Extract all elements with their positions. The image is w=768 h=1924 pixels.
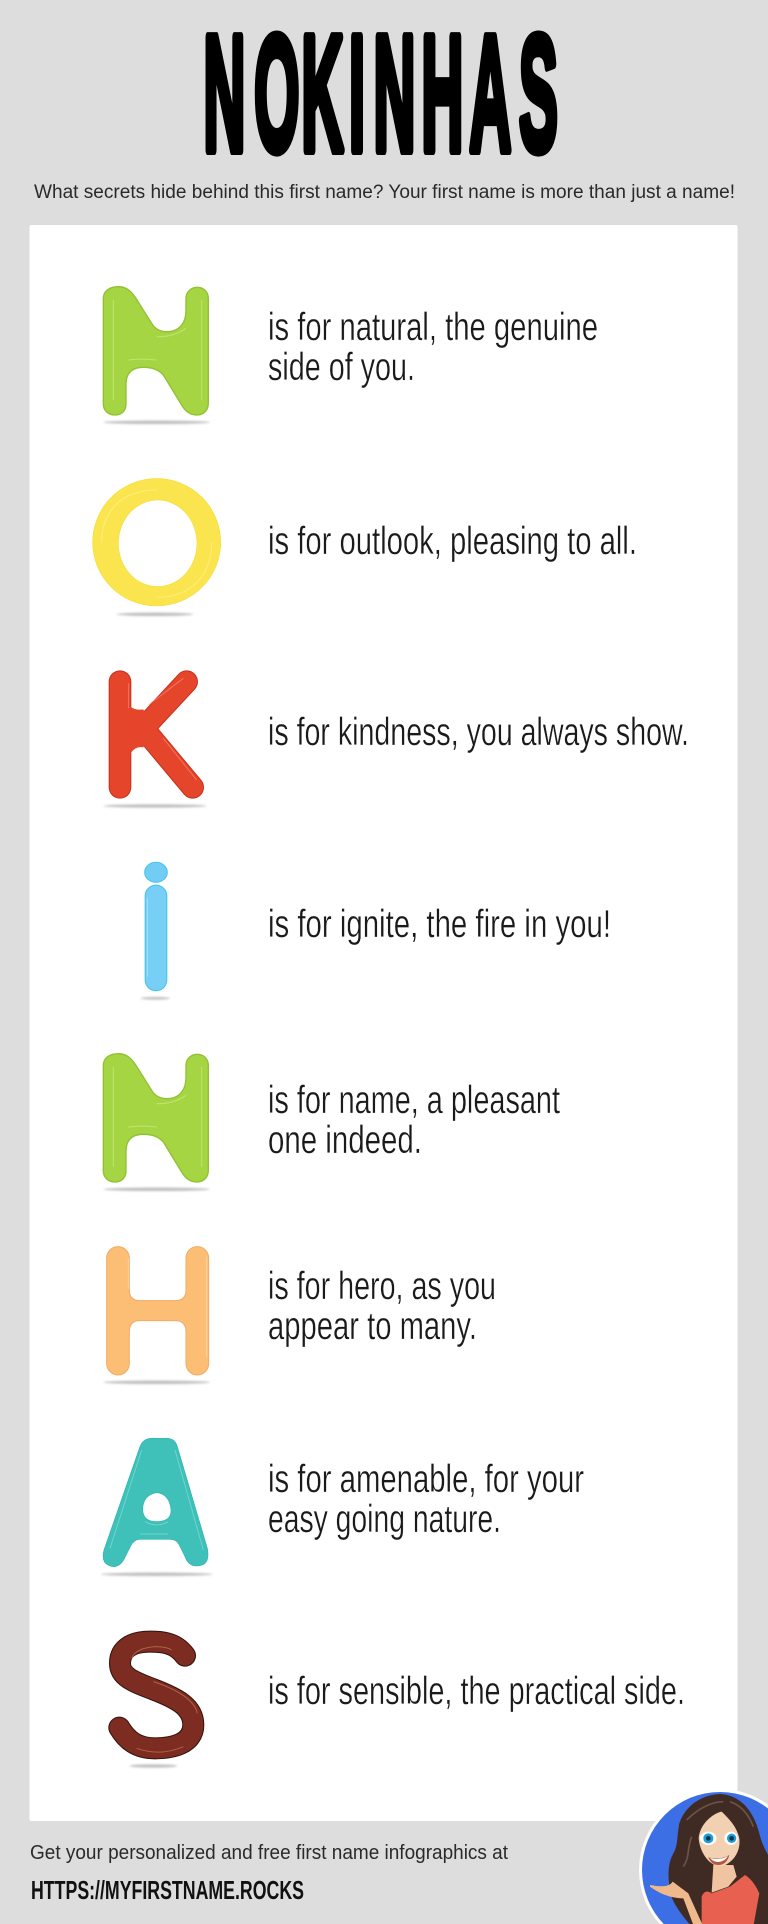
icon: glossy brown S bbox=[119, 1642, 197, 1768]
icon: glossy teal A bbox=[101, 1438, 213, 1576]
icon: glossy orange H bbox=[103, 1247, 210, 1384]
footer text: Get your personalized and free first name infographics at bbox=[30, 1842, 508, 1864]
icon: glossy blue i bbox=[141, 862, 170, 1000]
text: name: one indeed. bbox=[268, 1119, 422, 1162]
icon: glossy green N second bbox=[103, 1054, 210, 1191]
text: natural: is for natural, the genuine bbox=[268, 306, 598, 349]
row: letter N name bbox=[103, 1054, 560, 1191]
panel: letter meanings card bbox=[30, 225, 738, 1821]
row: letter S sensible bbox=[119, 1642, 685, 1768]
footer url: HTTPS://MYFIRSTNAME.ROCKS bbox=[31, 1875, 304, 1905]
row: letter H hero bbox=[103, 1247, 496, 1384]
row: letter K kindness bbox=[103, 678, 689, 808]
text: hero: is for hero, as you bbox=[268, 1265, 496, 1308]
row: letter N natural bbox=[103, 287, 598, 424]
text: name: is for name, a pleasant bbox=[268, 1079, 560, 1122]
text: natural: side of you. bbox=[268, 346, 415, 389]
text: amenable bbox=[268, 1458, 584, 1541]
icon: glossy green N bbox=[103, 287, 210, 424]
text: outlook: is for outlook, pleasing to all. bbox=[268, 520, 637, 563]
text: amenable: is for amenable, for your bbox=[268, 1458, 584, 1501]
text: hero bbox=[268, 1265, 496, 1348]
text: ignite: is for ignite, the fire in you! bbox=[268, 903, 611, 946]
row: letter O outlook bbox=[93, 479, 637, 616]
text: natural bbox=[268, 306, 598, 389]
row: letter A amenable bbox=[101, 1438, 584, 1576]
text: hero: appear to many. bbox=[268, 1305, 477, 1348]
row: letter I ignite bbox=[141, 862, 611, 1000]
icon: glossy red K bbox=[103, 678, 207, 808]
title: NOKINHAS bbox=[203, 3, 558, 186]
text: amenable: easy going nature. bbox=[268, 1498, 501, 1541]
icon: portrait avatar bbox=[639, 1789, 768, 1924]
text: name bbox=[268, 1079, 560, 1162]
icon: glossy yellow O bbox=[93, 479, 221, 616]
subtitle: What secrets hide behind this first name? Your first name is more than just a name! bbox=[34, 182, 735, 203]
